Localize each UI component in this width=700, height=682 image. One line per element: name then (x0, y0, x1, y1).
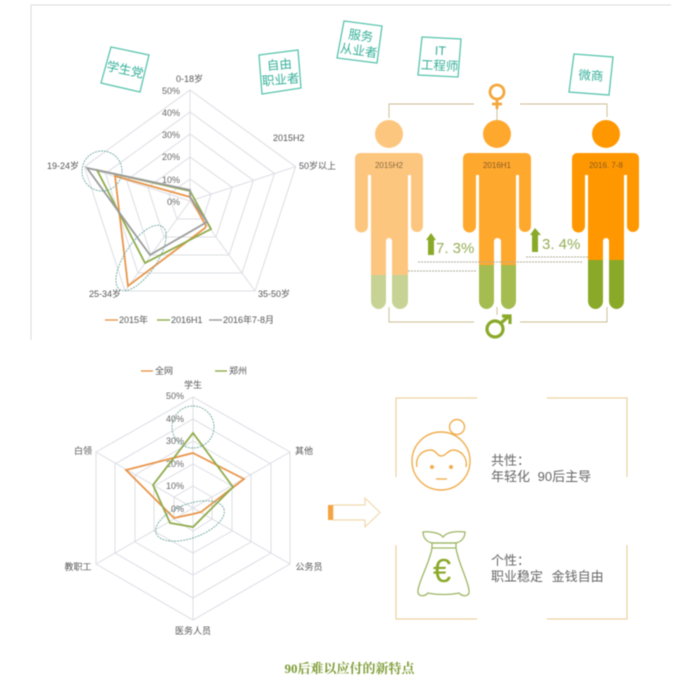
figure: 2016 July-August (572, 120, 639, 309)
radar axis labels: occupation (64, 379, 323, 636)
figure: 2015H2 (355, 120, 423, 309)
radar axis labels: age (47, 73, 336, 299)
radar tick labels: age: 40% (162, 108, 180, 118)
stamp: micro-merchants (569, 54, 613, 95)
legend: age radar: 2016H1 (171, 315, 203, 325)
radar tick labels: age (162, 86, 180, 207)
highlight circle: students (172, 406, 214, 448)
stamp: IT engineers: 工程师 (420, 57, 459, 74)
legend: age radar: 2015年 (119, 314, 148, 325)
caption: 90后难以应付的新特点 (284, 661, 415, 676)
radar tick labels: occupation: 40% (166, 414, 184, 424)
callout: up 7.3% (426, 233, 474, 257)
radar tick labels: occupation: 50% (166, 391, 184, 401)
icon: euro money bag: € (433, 552, 451, 589)
callout: up 3.4% (530, 228, 580, 253)
legend: occupation radar (141, 365, 247, 376)
highlight ellipse: 25-34 (106, 218, 176, 298)
stamp: service workers (337, 21, 382, 63)
icon: young face (412, 420, 470, 490)
stamp: freelancers: 职业者 (261, 71, 300, 89)
callout: up 3.4%: 3. 4% (542, 236, 580, 253)
figure: 2016H1: 2016H1 (483, 161, 512, 170)
radar axis labels: occupation: 医务人员 (175, 625, 211, 636)
icon: euro money bag (418, 532, 469, 596)
icon: male symbol (487, 316, 510, 337)
radar tick labels: occupation: 0% (171, 504, 184, 514)
stamp: freelancers: 自由 (266, 57, 292, 73)
highlight circle: 19-24 (82, 151, 122, 191)
series: Zhengzhou (153, 433, 233, 527)
radar tick labels: age: 0% (167, 197, 180, 207)
legend: occupation radar: 郑州 (229, 365, 247, 376)
callout: up 7.3%: 7. 3% (436, 240, 474, 257)
stamp: service workers: 从业者 (339, 41, 378, 60)
panel: gender figures (355, 85, 639, 337)
text: individuality (491, 553, 604, 584)
stamp: IT engineers: IT (434, 44, 447, 58)
radar axis labels: occupation: 学生 (184, 379, 202, 390)
arrow: to summary (328, 498, 380, 527)
figure: 2015H2: 2015H2 (375, 161, 404, 170)
icon: female symbol (490, 85, 504, 109)
radar tick labels: occupation: 30% (166, 436, 184, 446)
radar grid: occupation (96, 397, 290, 620)
comparison lines (408, 257, 588, 271)
radar axis labels: age: 50岁以上 (299, 160, 336, 171)
radar tick labels: age: 10% (162, 175, 180, 185)
series: nationwide (126, 453, 244, 518)
radar tick labels: age: 30% (162, 130, 180, 140)
stamp: freelancers (259, 50, 301, 94)
radar axis labels: age: 2015H2 (273, 133, 305, 143)
radar axis labels: age: 25-34岁 (89, 288, 121, 299)
stamp: students: 学生党 (105, 58, 145, 81)
connector lines: female (389, 104, 607, 120)
panel: age radar chart (47, 73, 336, 325)
text: individuality: 个性： (491, 553, 530, 568)
radar axis labels: occupation: 白领 (74, 445, 92, 456)
stamp: IT engineers (418, 37, 461, 77)
legend: age radar: 2016年7-8月 (223, 314, 274, 325)
stamp: micro-merchants: 微商 (578, 67, 604, 84)
radar axis labels: occupation: 公务员 (295, 561, 323, 572)
text: commonality: 年轻化 90后主导 (491, 469, 591, 484)
series: 2016H1 (97, 170, 211, 263)
legend: age radar (105, 314, 274, 325)
radar axis labels: age: 0-18岁 (176, 73, 203, 84)
radar axis labels: age: 35-50岁 (258, 288, 290, 299)
connector lines: male (389, 307, 607, 322)
highlight ellipse: low-share occupations (150, 493, 230, 549)
panel: summary frame (396, 398, 627, 619)
figure: 2016 July-August: 2016. 7-8 (589, 161, 623, 170)
radar axis labels: age: 19-24岁 (47, 160, 79, 171)
stamp: service workers: 服务 (347, 26, 374, 45)
text: commonality: 共性： (491, 453, 530, 468)
frame lines (396, 398, 627, 619)
legend: occupation radar: 全网 (155, 365, 173, 376)
radar grid: age (84, 90, 296, 291)
radar tick labels: occupation (166, 391, 184, 514)
stamp: students (101, 47, 149, 92)
radar axis labels: occupation: 教职工 (64, 561, 92, 572)
series: 2015 (115, 176, 206, 286)
radar tick labels: age: 50% (162, 86, 180, 96)
text: commonality (491, 453, 591, 484)
radar tick labels: occupation: 10% (166, 481, 184, 491)
radar tick labels: occupation: 20% (166, 459, 184, 469)
text: individuality: 职业稳定 金钱自由 (491, 569, 604, 584)
radar axis labels: occupation: 其他 (295, 445, 313, 456)
figure: 2016H1 (463, 120, 531, 309)
panel: occupation radar chart (64, 365, 323, 636)
radar tick labels: age: 20% (162, 152, 180, 162)
series: 2016 July-August (87, 168, 207, 255)
